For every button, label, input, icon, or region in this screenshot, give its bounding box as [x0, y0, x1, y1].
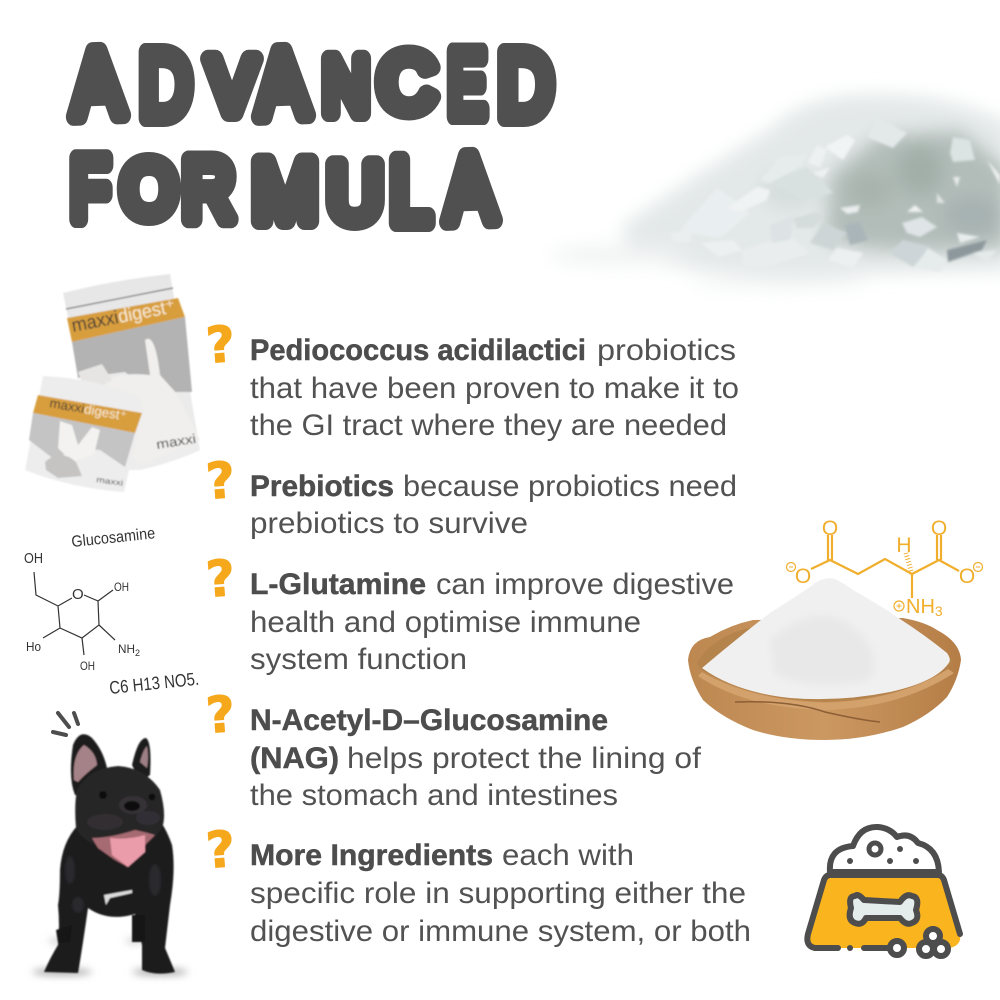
item: N-Acetyl-D-Glucosamine: helps protect the lining of	[347, 742, 702, 775]
title: Advanced Formula	[70, 30, 553, 243]
icon: question mark: ?	[204, 315, 237, 375]
bowl body	[688, 618, 961, 740]
item: N-Acetyl-D-Glucosamine	[204, 685, 702, 812]
title line: FORMULA: U	[328, 147, 382, 239]
title line: ADVANCED: D	[498, 33, 553, 139]
large jar: maxxidigest⁺	[70, 296, 177, 337]
icon: question mark: ?	[204, 549, 237, 609]
item: Pediococcus acidilactici: probiotics	[597, 334, 736, 367]
diagram: orange L-glutamine molecule: O	[795, 565, 811, 588]
item: N-Acetyl-D-Glucosamine: the stomach and intestines	[250, 779, 618, 812]
small jar: maxxi	[96, 475, 124, 488]
item: More Ingredients: specific role in supporting either the	[250, 877, 746, 910]
title line: FORMULA: F	[70, 139, 110, 238]
diagram: orange L-glutamine molecule: 3	[935, 603, 943, 619]
item: More Ingredients	[204, 820, 751, 948]
bowl body	[807, 875, 960, 948]
dog mouth and tongue	[92, 830, 155, 867]
image: maxxidigest product jars	[25, 274, 200, 492]
bowl inner shade	[697, 625, 953, 702]
item: L-Glutamine	[204, 549, 734, 676]
item: L-Glutamine: L-Glutamine	[250, 568, 426, 601]
diagram: orange L-glutamine molecule: H	[896, 534, 912, 557]
diagram: hand-drawn glucosamine structure: C6 H13 NO5.	[108, 669, 200, 698]
title line: ADVANCED: D	[140, 33, 192, 139]
item: L-Glutamine: health and optimise immune	[250, 606, 641, 639]
title line: ADVANCED: A	[70, 30, 125, 138]
diagram: hand-drawn glucosamine structure: Ho	[26, 639, 41, 654]
dog chest patch	[104, 890, 132, 905]
image: French bulldog	[32, 713, 188, 975]
icon: surprise marks	[53, 713, 78, 735]
diagram: orange L-glutamine molecule: O	[822, 517, 838, 540]
list: ingredients	[204, 315, 751, 948]
title line: ADVANCED: C	[378, 38, 436, 128]
large jar	[63, 274, 200, 470]
item: Pediococcus acidilactici: the GI tract where they are needed	[250, 409, 727, 442]
dog head	[75, 766, 164, 852]
diagram: hand-drawn glucosamine structure: OH	[24, 550, 43, 567]
title line: ADVANCED: A	[255, 30, 310, 138]
item: Prebiotics: because probiotics need	[403, 470, 737, 503]
title line: ADVANCED: E	[448, 31, 486, 136]
item: Pediococcus acidilactici: that have been proven to make it to	[250, 372, 739, 405]
item: N-Acetyl-D-Glucosamine: (NAG)	[250, 742, 339, 775]
diagram: orange L-glutamine molecule: O	[931, 517, 947, 540]
small jar	[25, 376, 143, 492]
title line: FORMULA: R	[182, 142, 234, 238]
diagram: hand-drawn glucosamine structure: 2	[135, 648, 140, 658]
diagram: orange L-glutamine molecule: O	[959, 565, 975, 588]
item: Prebiotics: prebiotics to survive	[250, 507, 528, 540]
diagram: hand-drawn glucosamine structure: O	[72, 586, 84, 603]
small jar: maxxidigest⁺	[48, 395, 128, 423]
item: L-Glutamine: system function	[250, 643, 467, 676]
diagram: orange L-glutamine molecule	[786, 517, 982, 619]
diagram: hand-drawn glucosamine structure: OH	[114, 580, 129, 594]
title line: ADVANCED: N	[323, 42, 369, 130]
dog ears	[71, 734, 107, 795]
kibble pieces	[890, 929, 948, 956]
title line: ADVANCED	[70, 30, 553, 139]
item: Pediococcus acidilactici	[204, 315, 739, 442]
icon: question mark: ?	[204, 820, 237, 880]
item: N-Acetyl-D-Glucosamine: N-Acetyl-D–Glucosamine	[250, 704, 608, 737]
item: Pediococcus acidilactici: Pediococcus acidilactici	[250, 334, 586, 367]
icon: dog food bowl	[807, 827, 960, 956]
dog body and legs	[44, 815, 175, 974]
diagram: hand-drawn glucosamine structure: OH	[80, 659, 95, 673]
diagram: hand-drawn glucosamine structure: NH	[118, 642, 135, 656]
dog shadows	[32, 939, 188, 975]
title line: FORMULA: A	[443, 135, 497, 243]
item: More Ingredients: digestive or immune system, or both	[250, 915, 751, 948]
item: L-Glutamine: can improve digestive	[436, 568, 734, 601]
image: wooden bowl of white powder	[688, 578, 961, 740]
diagram: hand-drawn glucosamine structure	[24, 525, 200, 698]
powder mound	[702, 578, 950, 699]
title line: FORMULA	[70, 135, 497, 243]
bone	[850, 895, 917, 924]
image: pile of white flakes	[550, 95, 1000, 288]
icon: question mark: ?	[204, 451, 237, 511]
diagram: orange L-glutamine molecule: NH	[906, 596, 935, 618]
kibble heap	[830, 827, 939, 872]
title line: FORMULA: O	[122, 145, 176, 233]
item: Prebiotics	[204, 451, 737, 540]
item: Prebiotics: Prebiotics	[250, 470, 394, 503]
item: More Ingredients: each with	[502, 839, 634, 872]
icon: question mark: ?	[204, 685, 237, 745]
item: More Ingredients: More Ingredients	[250, 839, 493, 872]
title line: FORMULA: L	[390, 141, 431, 243]
diagram: hand-drawn glucosamine structure: Glucosamine	[71, 525, 156, 551]
large jar: maxxi	[155, 431, 197, 452]
title line: ADVANCED: V	[208, 42, 257, 130]
title line: FORMULA: M	[252, 144, 318, 240]
dog body highlights	[65, 856, 161, 913]
